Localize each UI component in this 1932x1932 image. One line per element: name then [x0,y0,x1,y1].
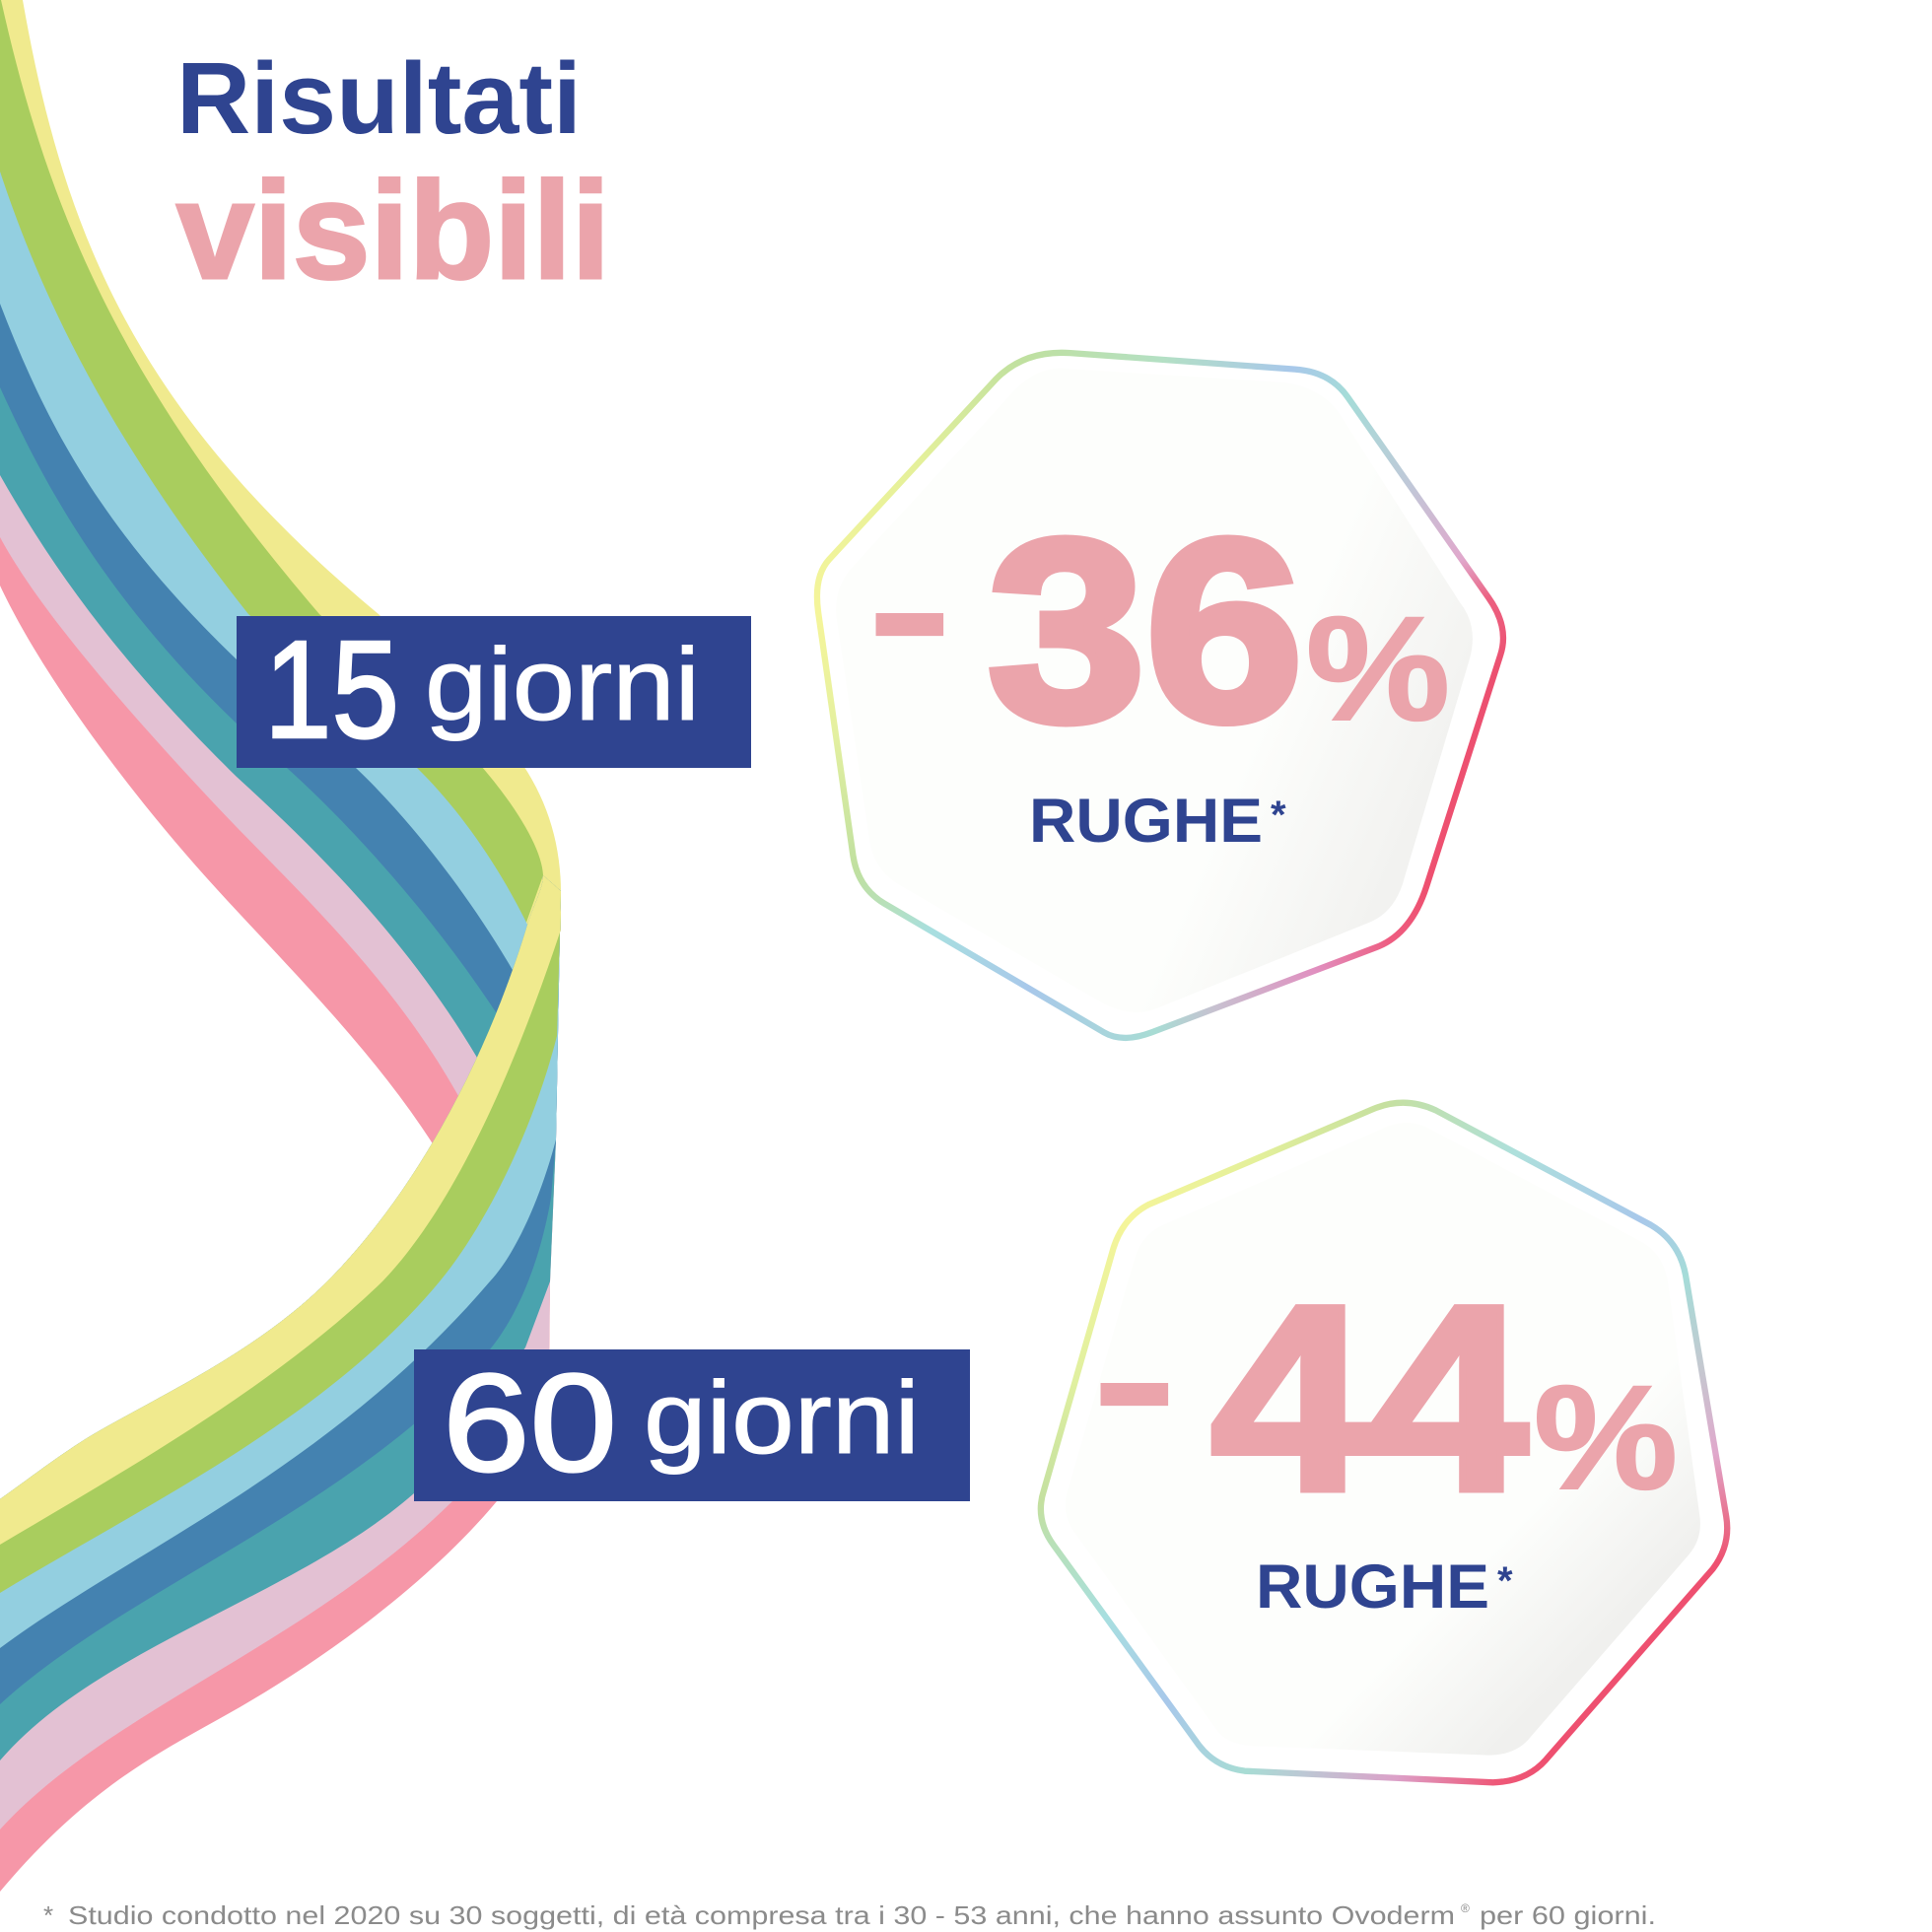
value: -44% [1090,1250,1678,1546]
value: -36%: % [1306,586,1450,751]
value: -36%: - [865,501,954,715]
value: -36% [865,486,1450,775]
title [176,41,610,308]
label: 15 giorni: giorni [425,628,700,742]
badge shape [814,349,1506,1041]
footnote: * [43,1900,53,1930]
badge: -44% rughe [1037,1100,1731,1786]
label: 15 giorni: 15 [264,611,399,767]
caption: RUGHE: RUGHE [1029,787,1263,856]
value: -44%: 44 [1210,1250,1530,1546]
value: -44%: % [1534,1354,1678,1520]
badge: -36% rughe [814,349,1506,1041]
label: 60 giorni: giorni [644,1361,920,1476]
label: 15 giorni [237,611,751,768]
caption: RUGHE: RUGHE [1256,1552,1489,1622]
heading: Risultati: Risultati [176,41,582,155]
label: 60 giorni: 60 [443,1345,617,1500]
footnote: ® [1461,1901,1470,1915]
footnote: per 60 giorni. [1480,1900,1656,1930]
footnote: Studio condotto nel 2020 su 30 soggetti, di età compresa tra i 30 - 53 anni, che hanno assunto Ovoderm [68,1900,1455,1930]
value: -44%: - [1090,1271,1179,1484]
badge shape [1037,1100,1731,1786]
value: -36%: 36 [988,486,1303,775]
ribbon: lower section [0,875,561,1904]
label: 60 giorni [414,1345,970,1501]
ribbon: upper section [0,0,561,1183]
caption: RUGHE: * [1497,1559,1513,1603]
caption: RUGHE: * [1271,794,1286,837]
heading: visibili: visibili [176,153,610,308]
